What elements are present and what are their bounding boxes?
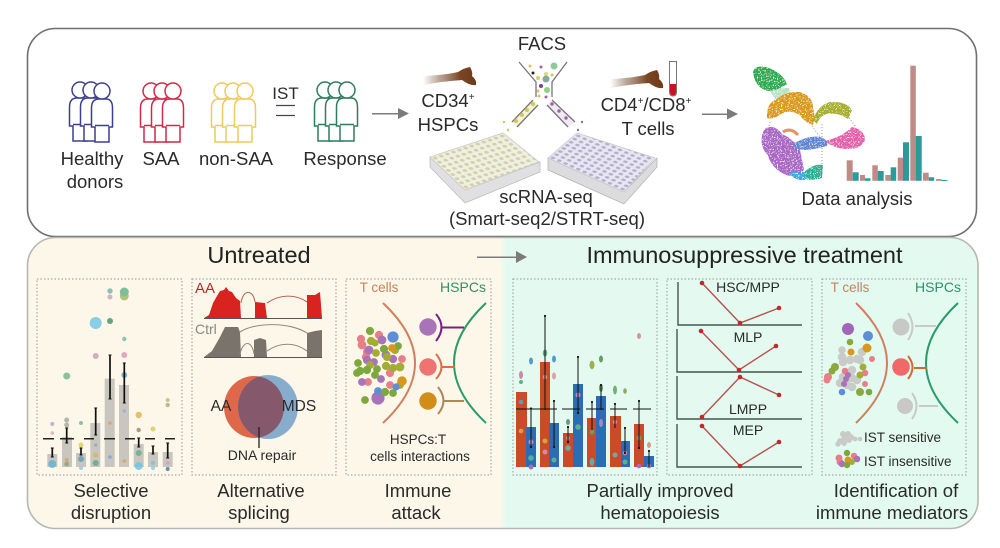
chart: paired bars with dots xyxy=(516,315,654,470)
panel: outcomes xyxy=(28,238,978,528)
label: healthy donors: donors xyxy=(67,171,123,192)
legend: IST insensitive: IST insensitive xyxy=(864,454,952,469)
label: healthy donors: Healthy xyxy=(61,148,123,169)
heading: untreated: Untreated xyxy=(207,242,311,268)
arrow: to CD34 HSPCs xyxy=(372,108,409,119)
label: HSPCs: HSPCs xyxy=(915,279,961,295)
diagram: cell membranes xyxy=(856,303,958,423)
arrow: untreated to treatment xyxy=(477,251,527,263)
label: T cells: T cells xyxy=(360,280,399,295)
label: CD34+ HSPCs: HSPCs xyxy=(418,114,478,135)
label: CD34+ HSPCs: CD34 xyxy=(421,90,469,111)
label: HSPCs: HSPCs xyxy=(440,279,486,295)
panel: alternative splicing xyxy=(192,279,336,523)
label: CD4+/CD8+ T cells: CD4 xyxy=(601,94,638,115)
label: T cells: T cells xyxy=(831,280,870,295)
label: CD4+/CD8+ T cells: + xyxy=(686,96,692,107)
diagram: receptors and ligands xyxy=(892,313,938,419)
icon: SAA group xyxy=(140,83,184,142)
chart: bars with patient dots xyxy=(43,288,175,471)
caption: Immune xyxy=(385,480,451,501)
icon: response group xyxy=(314,82,358,141)
label: CD34+ HSPCs: + xyxy=(469,92,475,103)
label: CD4+/CD8+ T cells: + xyxy=(638,96,644,107)
chart: gene expression bars xyxy=(847,66,947,181)
icon: bone right xyxy=(610,70,663,88)
label: interactions: HSPCs:T xyxy=(390,432,446,447)
caption: splicing xyxy=(228,502,290,523)
panel: lineage trend lines xyxy=(667,279,812,475)
panel: experimental workflow xyxy=(28,28,976,236)
caption: Selective xyxy=(73,480,149,501)
chart: AA and MDS venn: DNA repair xyxy=(228,447,297,463)
icon: blood tube xyxy=(670,62,676,96)
diagram: cell membranes xyxy=(383,303,486,423)
chart: HSC/MPP: HSC/MPP xyxy=(716,279,780,295)
label: scRNA-seq: (Smart-seq2/STRT-seq) xyxy=(449,208,645,229)
chart: AA and MDS venn xyxy=(211,375,316,463)
icon: bone left xyxy=(423,67,476,85)
label: interactions: cells interactions xyxy=(370,449,470,464)
chart: AA and MDS venn: AA xyxy=(211,398,232,415)
heading: immunosuppressive treatment: Immunosuppressive treatment xyxy=(586,242,903,268)
label: CD4+/CD8+ T cells: T cells xyxy=(621,118,675,139)
chart: HSC/MPP xyxy=(678,279,802,325)
label: data analysis: Data analysis xyxy=(801,188,913,209)
chart: MLP xyxy=(677,329,802,372)
icon: purple plate xyxy=(548,133,657,204)
icon: FACS sorter xyxy=(503,62,583,131)
chart: AA sashimi track: AA xyxy=(195,280,215,297)
diagram: T cell clones with sensitive clones greyed xyxy=(824,323,875,396)
chart: control sashimi track: Ctrl xyxy=(195,321,217,337)
arrow: to data analysis xyxy=(702,108,738,120)
label: CD4+/CD8+ T cells: /CD8 xyxy=(643,94,686,115)
icon: yellow plate xyxy=(430,133,540,203)
legend: IST sensitive: IST sensitive xyxy=(864,430,941,445)
legend: IST insensitive xyxy=(836,450,952,469)
chart: MEP xyxy=(677,422,802,468)
chart: LMPP: LMPP xyxy=(729,401,767,417)
label: FACS: FACS xyxy=(518,33,566,54)
label: SAA: SAA xyxy=(142,148,180,169)
diagram: T cell clones xyxy=(354,328,406,404)
chart: MEP: MEP xyxy=(733,422,763,438)
chart: AA and MDS venn: MDS xyxy=(282,398,316,415)
chart: LMPP xyxy=(677,375,802,419)
caption: attack xyxy=(391,502,441,523)
label: scRNA-seq: scRNA-seq xyxy=(499,186,593,207)
legend: IST sensitive xyxy=(836,430,941,446)
panel: selective disruption xyxy=(37,279,182,523)
label: IST with arrow bars xyxy=(272,84,299,116)
chart: control sashimi track xyxy=(195,321,322,358)
panel: immune mediators xyxy=(816,279,968,523)
label: non-SAA: non-SAA xyxy=(199,148,274,169)
caption: Partially improved xyxy=(586,480,734,501)
panel: partially improved hematopoiesis xyxy=(513,279,734,523)
chart: MLP: MLP xyxy=(734,329,762,345)
chart: UMAP clusters xyxy=(753,67,865,180)
label: response: Response xyxy=(303,148,387,169)
diagram: receptors and ligands xyxy=(419,314,464,414)
icon: healthy donors group xyxy=(70,82,112,142)
caption: Identification of xyxy=(834,480,958,501)
caption: disruption xyxy=(71,502,151,523)
caption: immune mediators xyxy=(816,502,968,523)
chart: AA sashimi track xyxy=(195,280,322,318)
icon: non-SAA group xyxy=(212,83,256,142)
caption: Alternative xyxy=(217,480,305,501)
panel: immune attack xyxy=(346,279,491,523)
caption: hematopoiesis xyxy=(600,502,720,523)
label: IST with arrow bars: IST xyxy=(272,84,299,103)
